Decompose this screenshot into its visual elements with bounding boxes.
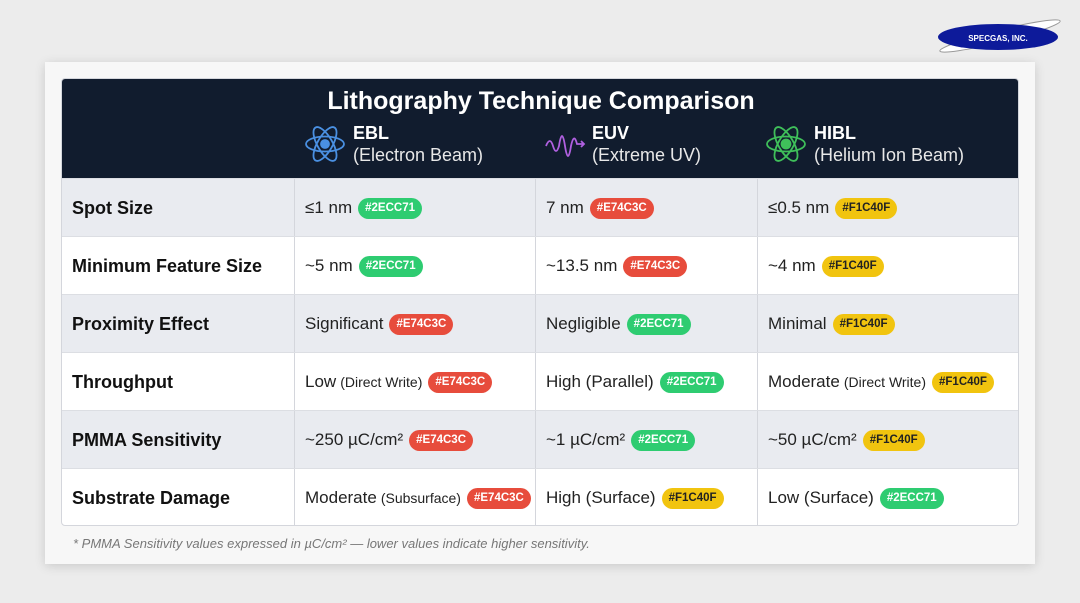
- row: Minimum Feature Size: ~13.5 nm: [546, 256, 617, 275]
- row: Substrate Damage: #2ECC71: [887, 492, 937, 504]
- row: PMMA Sensitivity: PMMA Sensitivity: [72, 430, 221, 450]
- title: Lithography Technique Comparison: [327, 87, 755, 115]
- row: Proximity Effect: Minimal: [768, 314, 827, 333]
- row: Minimum Feature Size: [62, 236, 1020, 294]
- row: Substrate Damage: (Subsurface): [381, 490, 461, 506]
- row: Proximity Effect: #E74C3C: [396, 318, 446, 330]
- row: Spot Size: ≤1 nm: [305, 198, 352, 217]
- row: Throughput: #F1C40F: [939, 376, 987, 388]
- logo: SPECGAS: [938, 19, 1061, 53]
- tech: HIBL: [766, 123, 964, 165]
- row: Minimum Feature Size: ~4 nm: [768, 256, 816, 275]
- header: [62, 79, 1020, 178]
- row: Spot Size: #E74C3C: [597, 202, 647, 214]
- row: PMMA Sensitivity: ~250 µC/cm²: [305, 430, 403, 449]
- row: Substrate Damage: Low (Surface): [768, 488, 874, 507]
- row: Proximity Effect: #2ECC71: [634, 318, 684, 330]
- row: Throughput: High (Parallel): [546, 372, 654, 391]
- row: Spot Size: 7 nm: [546, 198, 584, 217]
- row: PMMA Sensitivity: #F1C40F: [870, 434, 918, 446]
- row: Proximity Effect: Proximity Effect: [72, 314, 209, 334]
- tech: HIBL: HIBL: [814, 123, 856, 143]
- tech: EUV: [545, 123, 701, 165]
- row: PMMA Sensitivity: ~1 µC/cm²: [546, 430, 625, 449]
- tech: EUV: EUV: [592, 123, 629, 143]
- tech: EBL: (Electron Beam): [353, 145, 483, 165]
- row: Minimum Feature Size: #2ECC71: [366, 260, 416, 272]
- row: Proximity Effect: Significant: [305, 314, 383, 333]
- row: Minimum Feature Size: #E74C3C: [630, 260, 680, 272]
- row: Throughput: #E74C3C: [435, 376, 485, 388]
- row: Proximity Effect: #F1C40F: [840, 318, 888, 330]
- row: Throughput: Moderate: [768, 372, 840, 391]
- row: Substrate Damage: Moderate: [305, 488, 377, 507]
- footnote: * PMMA Sensitivity values expressed in µC/cm² — lower values indicate higher sensitivity.: [73, 536, 590, 551]
- row: PMMA Sensitivity: #E74C3C: [416, 434, 466, 446]
- card: [45, 62, 1035, 564]
- row: Substrate Damage: #E74C3C: [474, 492, 524, 504]
- row: Spot Size: #F1C40F: [842, 202, 890, 214]
- row: Substrate Damage: [62, 468, 1020, 526]
- row: Spot Size: #2ECC71: [365, 202, 415, 214]
- row: Throughput: (Direct Write): [844, 374, 926, 390]
- row: Throughput: Low: [305, 372, 336, 391]
- row: Proximity Effect: [62, 294, 1020, 352]
- row: PMMA Sensitivity: [62, 410, 1020, 468]
- logo: SPECGAS: SPECGAS, INC.: [968, 34, 1028, 43]
- row: Spot Size: Spot Size: [72, 198, 153, 218]
- row: Spot Size: [62, 178, 1020, 236]
- tech: EBL: [305, 123, 483, 165]
- row: Throughput: (Direct Write): [340, 374, 422, 390]
- row: PMMA Sensitivity: #2ECC71: [638, 434, 688, 446]
- row: Substrate Damage: #F1C40F: [669, 492, 717, 504]
- row: Substrate Damage: High (Surface): [546, 488, 656, 507]
- row: Minimum Feature Size: ~5 nm: [305, 256, 353, 275]
- row: Minimum Feature Size: #F1C40F: [829, 260, 877, 272]
- row: Spot Size: ≤0.5 nm: [768, 198, 829, 217]
- row: PMMA Sensitivity: ~50 µC/cm²: [768, 430, 857, 449]
- tech: EBL: EBL: [353, 123, 389, 143]
- row: Minimum Feature Size: Minimum Feature Size: [72, 256, 262, 276]
- row: Throughput: Throughput: [72, 372, 173, 392]
- row: Throughput: [62, 352, 1020, 410]
- row: Proximity Effect: Negligible: [546, 314, 621, 333]
- tech: HIBL: (Helium Ion Beam): [814, 145, 964, 165]
- tech: EUV: (Extreme UV): [592, 145, 701, 165]
- row: Substrate Damage: Substrate Damage: [72, 488, 230, 508]
- row: Throughput: #2ECC71: [667, 376, 717, 388]
